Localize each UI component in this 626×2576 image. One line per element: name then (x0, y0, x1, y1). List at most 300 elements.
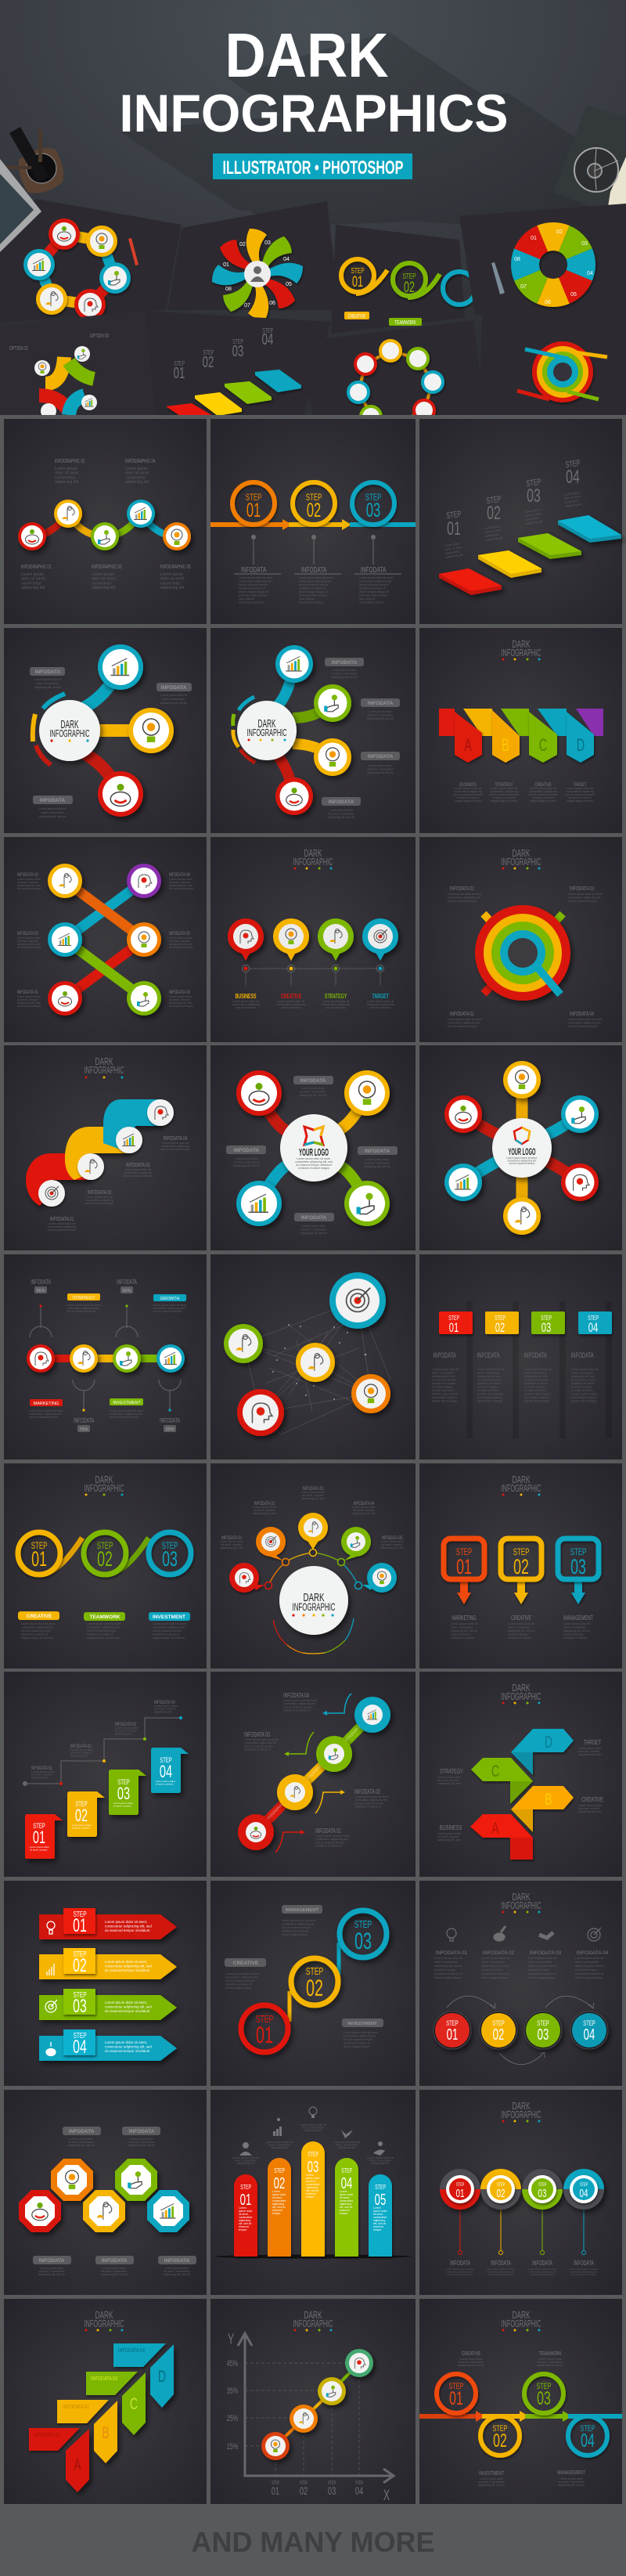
banner text: do eiusmod tempor incididunt (105, 2049, 150, 2053)
desk: pen pot (0, 127, 63, 193)
banner text: do eiusmod tempor incididunt (105, 1968, 150, 1972)
bookmark numbers: 03 (117, 1784, 130, 1803)
mock sheet: pinwheel: 03 (264, 240, 271, 246)
captions: Lorem ipsum dolor (559, 2477, 584, 2480)
pill captions: Lorem ipsum dolor (365, 1158, 390, 1161)
heading: DARK (512, 1474, 531, 1485)
square labels (456, 1548, 587, 1578)
ring labels: 01 (449, 2389, 463, 2409)
mock sheet: segmented donut: 08 (514, 257, 520, 262)
bookmark notes: sit amet, consect (30, 1848, 48, 1851)
step captions: dolore magna aliqua. (528, 1976, 556, 1979)
step labels: 03 (527, 486, 541, 507)
column text: amet, consectetur (432, 1372, 455, 1375)
mock sheet: segmented donut (459, 204, 626, 326)
pill captions: sit amet, consectetur (331, 672, 358, 675)
infodata text: exercitation ullamco (299, 601, 324, 604)
pennants (66, 2344, 174, 2492)
stair captions: adipiscing elit, (565, 503, 583, 508)
infodata text: enim ad minim veniam, (359, 593, 388, 597)
arrow line (419, 2411, 622, 2422)
column text: sit amet, (272, 2196, 282, 2199)
panel: your logo six-node hub (419, 1045, 622, 1250)
mock sheet: segmented donut: 02 (556, 229, 563, 235)
captions bottom: consectetur adipiscing elit, (568, 1021, 601, 1024)
mock sheet: segmented donut: 06 (545, 300, 551, 305)
line captions: Lorem ipsum dolor (154, 1705, 178, 1708)
bookmark notes: Lorem ipsum dolor (156, 1780, 175, 1783)
stair captions: Lorem ipsum (563, 491, 580, 496)
rings (475, 905, 570, 1001)
lower captions: dolor sit amet, (160, 577, 185, 582)
ring connectors (39, 1538, 149, 1575)
step captions: dolore magna aliqua. (575, 1976, 603, 1979)
tag labels (34, 2347, 145, 2438)
captions: consectetur adipiscing elit, (283, 1702, 316, 1705)
heading: DARK (304, 2309, 322, 2321)
square labels: STEP (513, 1548, 530, 1558)
stepped line (23, 1716, 182, 1785)
nodes (236, 1070, 390, 1226)
captions: consectetur adipiscing elit, (354, 1799, 387, 1802)
desk: laptop (0, 159, 41, 252)
captions: Lorem ipsum dolor sit amet, (244, 1738, 279, 1741)
white banner icons (45, 1921, 57, 2056)
lower percent labels: INFODATA (160, 1418, 180, 1424)
left captions: do eiusmod tempor (17, 1005, 42, 1008)
pill captions: sit amet, consectetur (300, 1090, 326, 1093)
flow arcs (447, 1996, 594, 2065)
pill captions: Lorem ipsum dolor (130, 2138, 154, 2141)
captions: consectetur adipiscing (529, 790, 557, 793)
nodes (98, 644, 174, 817)
captions: adipiscing elit, sed (578, 1810, 601, 1813)
disc text: STEP (537, 2019, 549, 2027)
step captions: INFODATA 03 (530, 1950, 562, 1956)
upper percent labels: 50% (122, 1289, 131, 1293)
captions top: sed do eiusmod tempor (448, 900, 477, 903)
axis letters and ticks: STEP (355, 2480, 364, 2486)
left captions: adipiscing elit, sed (17, 1001, 40, 1005)
pill captions: consectetur adipiscing elit, (21, 1625, 54, 1629)
square labels: 02 (513, 1554, 529, 1578)
pill captions: amet, consectetur (37, 682, 59, 685)
captions: TARGET (372, 994, 389, 1000)
ring labels (449, 2382, 595, 2452)
pills: INFODATA (69, 2129, 95, 2134)
captions: magna aliqua ut enim (491, 799, 517, 803)
mock sheet: node chain (333, 321, 467, 415)
bookmark notes: sit amet, consect (156, 1782, 174, 1785)
pill captions: consectetur adipiscing elit, (29, 1412, 62, 1416)
pill captions: sed do eiusmod tempor (153, 1310, 182, 1313)
captions: incididunt ut labore (451, 1636, 474, 1640)
captions: consectetur adipiscing (48, 1225, 76, 1228)
column text: exercitation ullamco (432, 1396, 457, 1399)
column text (239, 2174, 387, 2231)
step captions: adipiscing elit, sed do (575, 1964, 603, 1968)
captions: Lorem ipsum dolor (538, 2358, 563, 2361)
lower captions: dolor sit amet, (92, 577, 116, 582)
captions: consectetur adipiscing elit, (244, 1741, 277, 1744)
heading: INFOGRAPHIC (501, 1900, 541, 1911)
captions: sit amet, consectetur (478, 2480, 505, 2484)
column text: elit, sed do (340, 2206, 353, 2209)
captions: eiusmod tempor (563, 1633, 585, 1636)
captions top: INFODATA 03 (570, 886, 594, 892)
mock sheet: four arcs: OPTION 02 (9, 346, 28, 352)
captions: Lorem ipsum dolor sit (278, 1000, 304, 1003)
heading: INFOGRAPHIC (85, 1482, 124, 1494)
ring labels: STEP (581, 2424, 595, 2433)
step captions: eiusmod tempor (481, 1968, 503, 1972)
captions: adipiscing elit, sed do (537, 2364, 563, 2367)
pennant letters: D (158, 2367, 166, 2386)
central heading (247, 717, 286, 741)
panel: isometric stairs (419, 419, 622, 624)
upper captions: INFOGRAPHIC 02 (55, 459, 85, 464)
step captions: incididunt ut labore et (528, 1972, 557, 1975)
line captions: INFODATA 02 (70, 1744, 92, 1749)
square labels: STEP (570, 1548, 587, 1558)
panel: crossing bars with six nodes (4, 837, 207, 1042)
stair plates (439, 515, 621, 595)
pills: INFODATA (300, 1078, 326, 1084)
column text: ipsum dolor (306, 2177, 320, 2180)
step labels: 03 (366, 500, 380, 521)
captions: consectetur adipiscing elit, (487, 2271, 515, 2274)
captions: adipiscing elit, sed do (478, 2484, 505, 2487)
column text: Ut enim ad minim (432, 1389, 454, 1392)
bookmark numbers: 02 (75, 1806, 88, 1825)
inner faces (446, 2175, 598, 2203)
ring labels: 03 (354, 1928, 372, 1954)
mock sheet: pinwheel: 01 (223, 262, 229, 268)
pill captions: consectetur adipiscing elit, (153, 1625, 185, 1629)
line captions: sit amet, consect (31, 1773, 52, 1777)
pill captions: Lorem ipsum dolor sit amet, (225, 1972, 260, 1975)
step labels: STEP (246, 493, 262, 503)
right captions: adipiscing elit, sed (169, 1001, 192, 1005)
upper captions: adipiscing elit (55, 480, 79, 485)
captions bottom: Lorem ipsum dolor sit amet, (568, 1018, 603, 1021)
pill captions: consectetur adipiscing elit, (110, 1412, 142, 1416)
inner octagons (25, 2165, 183, 2226)
info pills (322, 658, 400, 806)
column text: adipiscing (306, 2186, 318, 2189)
captions: Lorem ipsum dolor (459, 2358, 484, 2361)
tab text: 04 (73, 2037, 87, 2058)
mock sheet: pinwheel: 07 (244, 303, 250, 308)
captions: adipiscing elit, sed do (563, 1629, 590, 1633)
heading (85, 1055, 124, 1079)
bubble icons (239, 1521, 387, 1584)
captions: sit amet, consect (254, 1509, 275, 1512)
ring labels: STEP (493, 2424, 507, 2433)
upper captions: consectetur (125, 475, 146, 480)
left captions: do eiusmod tempor (17, 946, 42, 949)
captions top: Lorem ipsum dolor sit amet, (568, 893, 603, 896)
bookmark numbers: STEP (160, 1756, 172, 1764)
axis letters and ticks: 03 (328, 2484, 336, 2498)
column text: amet, consectetur (477, 1372, 500, 1375)
column text: laboris nisi ut aliquip (571, 1400, 596, 1403)
infodata text: INFODATA (241, 565, 267, 574)
step labels: STEP (486, 494, 502, 506)
hero header (0, 0, 626, 428)
banner text: Lorem ipsum dolor sit amet, (105, 2001, 147, 2004)
column labels: 03 (308, 2158, 318, 2176)
captions bottom (448, 1011, 603, 1028)
hub connectors (79, 667, 151, 794)
pennant letters (464, 735, 585, 755)
panel: four step flags (419, 1254, 622, 1459)
bookmark numbers: STEP (117, 1778, 130, 1786)
captions: eiusmod tempor (508, 1633, 529, 1636)
left captions: sit amet, consect (17, 940, 38, 943)
pill captions: consectetur adipiscing elit, (87, 1625, 120, 1629)
captions: consectetur adipiscing (566, 790, 594, 793)
right captions: do eiusmod tempor (169, 887, 194, 890)
captions: Lorem ipsum dolor sit amet, (315, 1835, 350, 1838)
icon captions: adipiscing elit (304, 2129, 322, 2132)
column text: elit, sed do (373, 2222, 387, 2225)
panel: folded pennants A to D (419, 628, 622, 833)
captions: sed do eiusmod tempor (565, 793, 595, 796)
column labels: STEP (240, 2185, 251, 2191)
panel: four round steps with icons (419, 1881, 622, 2086)
column text: sit amet, (340, 2196, 350, 2199)
pill captions (225, 1919, 378, 2048)
column shadows (466, 1301, 612, 1438)
tab text (73, 1910, 87, 2058)
line captions: adipiscing elit (154, 1710, 171, 1713)
captions: Lorem ipsum dolor (437, 1776, 462, 1779)
pill captions: sit amet, consectetur (367, 767, 394, 770)
step captions: Lorem ipsum dolor sit (528, 1957, 557, 1960)
pill captions (233, 1087, 390, 1235)
captions: Lorem ipsum dolor (380, 1540, 405, 1543)
banners (39, 1914, 177, 2061)
lower percent labels: INFODATA (74, 1418, 94, 1424)
mock sheet: step loops: 01 (352, 273, 363, 290)
heading: INFOGRAPHIC (293, 2318, 333, 2329)
icon captions: adipiscing elit (338, 2146, 355, 2149)
mock sheet: 3D stairs: STEP (174, 361, 185, 367)
banner text: do eiusmod tempor incididunt (105, 1928, 150, 1932)
central heading: DARK (61, 718, 78, 731)
logo and text: YOUR LOGO (299, 1146, 329, 1158)
panel: five octagons (4, 2090, 207, 2295)
category pills: MARKETING (34, 1402, 59, 1406)
pill captions: consectetur adipiscing elit, (282, 1923, 315, 1926)
banner text: do eiusmod tempor incididunt (105, 2009, 150, 2013)
trend line (275, 2363, 359, 2446)
squares (444, 1539, 599, 1579)
stair captions: dolor sit amet, (563, 495, 581, 500)
column text: Lorem (340, 2190, 347, 2193)
stair captions (444, 491, 583, 559)
title: DARK (225, 20, 389, 90)
captions: incididunt ut labore (508, 1636, 531, 1640)
info pills: INFODATA (332, 660, 358, 666)
pills: INFODATA (39, 2258, 65, 2264)
pills (33, 2127, 196, 2264)
captions: TARGET (584, 1738, 602, 1746)
heading: DARK (512, 2100, 531, 2112)
captions: INFODATA 02 (254, 1501, 275, 1506)
node icons (110, 658, 160, 806)
captions: ut labore et dolore (457, 796, 479, 799)
central heading: DARK (304, 1591, 324, 1604)
pills: CREATIVE (233, 1961, 259, 1966)
column text: tempor (306, 2195, 315, 2199)
column text: Lorem ipsum dolor sit (524, 1368, 551, 1371)
icon captions: Lorem ipsum dolor sit (232, 2156, 259, 2159)
stair captions: adipiscing elit, (486, 536, 504, 542)
column labels: STEP (308, 2152, 318, 2158)
captions: Lorem ipsum dolor sit amet, (527, 2268, 557, 2271)
lower captions: dolor sit amet, (21, 577, 45, 582)
column text: eiusmod (373, 2225, 383, 2228)
bookmark notes: Lorem ipsum dolor (113, 1802, 133, 1805)
flag text (448, 1315, 599, 1336)
pills (226, 1076, 398, 1221)
infodata text: dolore magna aliqua. Ut (299, 590, 329, 593)
captions: BUSINESS (459, 782, 477, 788)
folded stripes (439, 709, 603, 736)
disc text: STEP (583, 2019, 595, 2027)
category pills: INVESTMENT (113, 1401, 141, 1405)
column labels: STEP (341, 2168, 352, 2174)
disc text: STEP (497, 2182, 505, 2188)
bookmark notes: sit amet, consect (113, 1804, 131, 1807)
info pills (30, 667, 192, 804)
captions: incididunt ut labore et (315, 1845, 342, 1848)
footer text: and many more: AND MANY MORE (191, 2526, 435, 2558)
ring labels: STEP (97, 1542, 113, 1552)
mock sheet: concentric rings (516, 341, 607, 406)
axis letters and ticks: X (383, 2487, 390, 2504)
heading: INFOGRAPHIC (501, 2318, 541, 2329)
infodata text: enim ad minim veniam, (299, 593, 328, 597)
right captions: INFODATA 06 (169, 872, 190, 878)
tab text: STEP (73, 1990, 87, 1999)
captions: incididunt ut labore et (244, 1748, 271, 1752)
stair captions: consectetur (525, 516, 541, 521)
column text: laboris nisi ut aliquip (432, 1400, 457, 1403)
pill captions: Lorem ipsum dolor (301, 1087, 326, 1090)
column text: ipsum dolor (373, 2210, 387, 2213)
right captions (169, 872, 194, 1008)
pennant letters: A (74, 2455, 81, 2474)
captions: adipiscing elit, sed do (451, 1629, 477, 1633)
infodata text: incididunt ut labore et (359, 587, 386, 590)
captions: TEAMWORK (539, 2351, 562, 2357)
captions: INFODATA 01 (221, 1535, 242, 1541)
mock sheet: 3D stairs: 04 (262, 330, 273, 348)
pill captions: Lorem ipsum dolor sit amet, (67, 1304, 101, 1307)
line captions: INFODATA 03 (115, 1722, 136, 1727)
banner text (105, 1920, 152, 2053)
lower captions: INFOGRAPHIC 03 (92, 565, 122, 570)
column text: Lorem ipsum dolor sit (477, 1368, 504, 1371)
pills: CREATIVE (27, 1614, 52, 1619)
step discs (434, 2011, 608, 2049)
step captions: eiusmod tempor (575, 1968, 597, 1972)
pills (225, 1905, 383, 2027)
captions: CREATIVE (462, 2351, 480, 2357)
pill captions: adipiscing elit, sed do (39, 815, 66, 818)
captions: sit amet, consect (437, 1779, 459, 1782)
captions: ut labore et dolore (569, 796, 591, 799)
heading (501, 847, 541, 869)
infodata text: Lorem ipsum dolor sit amet, (299, 576, 333, 579)
axis letters and ticks: 04 (355, 2484, 364, 2498)
captions: INFODATA 04 (354, 1501, 374, 1506)
curved arrows (275, 1694, 351, 1853)
nodes (275, 645, 351, 815)
central heading (292, 1591, 335, 1617)
column text: incididunt ut labore (571, 1382, 595, 1385)
pill captions: magna aliqua. Ut enim ad (87, 1636, 119, 1640)
line captions: adipiscing elit (115, 1732, 132, 1735)
captions: Lorem ipsum dolor sit (567, 787, 593, 790)
icon captions: Lorem ipsum dolor sit (300, 2123, 326, 2127)
pill captions: dolore magna aliqua (282, 1933, 308, 1936)
disc text: 03 (538, 2026, 549, 2044)
step captions: Lorem ipsum dolor sit (434, 1957, 463, 1960)
captions: adipiscing elit, sed do (558, 2484, 585, 2487)
right captions: sit amet, consect (169, 940, 190, 943)
stair captions: dolor sit amet, (524, 512, 542, 518)
lower captions: adipiscing elit (160, 586, 185, 590)
rings (241, 1910, 387, 2052)
pill captions: Lorem ipsum dolor (70, 2138, 94, 2141)
infodata text: sed do eiusmod tempor (239, 583, 268, 586)
bar labels: INFOGRAPHIC (343, 1723, 363, 1744)
stems (290, 1943, 339, 2022)
captions: Lorem ipsum dolor sit (451, 1622, 477, 1625)
banner text: Lorem ipsum dolor sit amet, (105, 1920, 147, 1924)
step captions: INFODATA 02 (483, 1950, 515, 1956)
ring labels: STEP (162, 1542, 178, 1552)
captions: sit amet, consectetur (558, 2480, 585, 2484)
icon captions: Lorem ipsum dolor sit (367, 2156, 394, 2159)
captions (244, 1693, 389, 1848)
infodata text: incididunt ut labore et (299, 587, 326, 590)
column text: adipiscing elit, sed (571, 1375, 594, 1378)
captions bottom: INFODATA 01 (450, 1011, 474, 1017)
upper captions: dolor sit amet, (125, 471, 149, 476)
captions: TARGET (574, 782, 587, 788)
ring labels: STEP (31, 1542, 48, 1552)
column text: elit, sed do (306, 2189, 319, 2192)
axis letters and ticks: STEP (300, 2480, 308, 2486)
ring labels: STEP (256, 2014, 273, 2026)
captions: Lorem ipsum dolor sit (508, 1622, 534, 1625)
column text: adipiscing (373, 2219, 385, 2222)
panel: ribbon staircase (4, 1045, 207, 1250)
pill captions: incididunt ut labore et (225, 1983, 252, 1986)
left captions: adipiscing elit, sed (17, 884, 40, 887)
heading: INFOGRAPHIC (85, 2318, 124, 2329)
pill captions: Lorem ipsum dolor (333, 669, 357, 672)
pennant letters (74, 2367, 166, 2474)
icon captions: Lorem ipsum dolor sit (333, 2141, 360, 2144)
axis letters and ticks: 25% (227, 2414, 238, 2423)
panel: four rings over and under a line (419, 2299, 622, 2504)
